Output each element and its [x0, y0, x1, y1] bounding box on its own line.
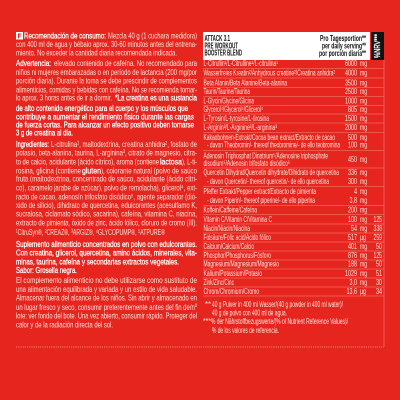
NRV percentages: 338	[374, 224, 382, 233]
table header: NRV column: %NRV***	[373, 34, 382, 58]
units: µg	[360, 233, 366, 242]
text block: usage recommendation	[16, 30, 197, 58]
units: mg	[360, 133, 367, 142]
NRV percentages: 50	[376, 242, 382, 251]
units: mg	[360, 177, 367, 186]
amounts per serving: 188	[348, 260, 357, 268]
ingredient names: L-Tyrosin/L-tyrosine/L-tirosina	[204, 114, 269, 123]
units: mg	[360, 140, 367, 150]
NRV percentages	[374, 215, 382, 296]
text block: ingredients: L-citrulina¹, maltodextrina, creatina anhidra², fosfato de	[51, 139, 197, 149]
NRV percentages: 51	[376, 269, 382, 278]
text block: warning: elevado contenido de cafeína. No recomendado para	[54, 58, 197, 68]
text block: product description: Sabor: Grosella negra.	[16, 265, 77, 275]
amounts per serving: 3500	[345, 78, 357, 88]
NRV percentages: 125	[374, 215, 382, 224]
units: mg	[360, 87, 367, 96]
units: mg	[360, 114, 367, 123]
units: mg	[360, 260, 367, 268]
text block: warning: porción diaria). Durante la toma se debe prescindir de complementos	[16, 76, 197, 86]
text block: usage recommendation: Recomendación de consumo:	[24, 30, 106, 40]
units: mg	[360, 78, 367, 88]
units: mg	[360, 206, 367, 214]
ingredient names: Phosphor/Phosphorus/Fósforo	[204, 251, 271, 260]
text block: warning: 3 g de creatina al día.	[16, 128, 73, 138]
text block: ingredients: rosina, glicina (contiene	[16, 165, 81, 175]
text block: warning: lo aprox. 3 horas antes de ir a dormir.	[16, 92, 112, 102]
text block: usage recommendation: miento. No exceder la cantidad diaria recomendada indicada.	[16, 48, 177, 58]
amounts per serving: 1500	[345, 114, 357, 123]
ingredient names: Magnesium/Magnesium/Magnesio	[204, 260, 279, 268]
ingredient names: Taurin/Taurine/Taurina	[204, 87, 250, 96]
units: µg	[360, 287, 366, 296]
units: mg	[360, 96, 367, 106]
ingredient names: Chrom/Chromium/Cromo	[204, 287, 259, 296]
amounts per serving: 517	[348, 233, 357, 242]
units: mg	[360, 196, 367, 205]
amounts per serving: 100	[348, 140, 357, 150]
ingredient names: Glycerol⁴/Glycerol⁴/Glicerol⁴	[204, 105, 263, 114]
table header: NRV column	[371, 32, 384, 60]
text block: ingredients: Ingredientes:	[16, 139, 49, 149]
amounts per serving: 100	[348, 215, 357, 224]
text block: ingredients: co), caramelo jarabe de azúcar), polvo de remolacha), glicerol⁴, ext-	[16, 182, 197, 192]
text block: product description: Suplemento alimenticio concentrados en polvo con edulcorantes.	[16, 239, 197, 249]
ingredient names	[204, 59, 340, 296]
text block: ingredients: racto de cacao, adenosín trifosfato disódico⁵, agente separador (dió-	[16, 191, 197, 201]
NRV percentages: 34	[376, 287, 382, 296]
text block: warning: Advertencia:	[16, 58, 51, 68]
NRV percentages: 259	[374, 233, 382, 242]
text block: storage notice: calor y de la radiación directa del sol.	[16, 320, 113, 330]
text block: warning: contribuye a aumentar el rendimiento físico durante las cargas	[16, 111, 194, 121]
units: mg	[360, 105, 367, 114]
units: mg	[360, 242, 367, 251]
amounts per serving: 4	[354, 187, 357, 196]
text block: ingredients: xido de silicio), dihidrato de quercetina, edulcorantes (acesulfamo K,	[16, 200, 197, 210]
text block: ingredients: gluten	[82, 165, 101, 175]
text block: usage recommendation: con 400 ml de agua y bébalo aprox. 30-60 minutos antes del entrena-	[16, 39, 197, 49]
amounts per serving	[345, 59, 357, 296]
text block: product description: minas, taurina, cafeína y secondarias extractos vegetales.	[16, 256, 179, 266]
footnotes: **	[205, 300, 211, 309]
footnotes: ***	[203, 317, 211, 326]
ingredient names: L-Glycin/Glycine/Glicina	[204, 96, 254, 106]
units	[360, 59, 367, 296]
units: mg	[360, 215, 367, 224]
text block: ingredients: ), colorante natural (polvo de saúco	[101, 165, 197, 175]
ingredient names: Folsäure/Folic acid/Ácido fólico	[204, 233, 271, 242]
amounts per serving: 1000	[345, 96, 357, 106]
icon: info square	[16, 32, 23, 40]
units: mg	[360, 251, 367, 260]
text block: warning: niños ni mujeres embarazadas o en período de lactancia (200 mg/por	[16, 67, 197, 77]
text block: ingredients	[16, 139, 197, 237]
amounts per serving: 401	[348, 242, 357, 251]
footnotes	[203, 300, 349, 335]
units: mg	[360, 187, 367, 196]
text block: ingredients: lactosa	[160, 156, 182, 166]
text block: storage notice: un lugar fresco y seco, consumir preferentemente antes del fin de/nº	[16, 302, 198, 312]
units: mg	[360, 59, 367, 68]
amounts per serving: 3,8	[350, 196, 357, 205]
text block: storage notice: Almacenar fuera del alcance de los niños. Sin abrir y almacenado en	[16, 292, 197, 302]
units: mg	[360, 68, 367, 78]
units: mg	[360, 123, 367, 132]
amounts per serving: 805	[348, 105, 357, 114]
ingredient names: disodium⁵/Adenosin trifosfato disódico⁵	[204, 159, 290, 168]
text block: storage notice: una alimentación equilibrada y variada y un estilo de vida saludable.	[16, 284, 197, 294]
ingredient names: Pfeffer Extrakt/Pepper extract/Extracto de pimienta	[204, 187, 316, 196]
text block: storage notice: El complemento alimenticio no debe utilizarse como sustituto de	[16, 275, 197, 285]
NRV percentages: 50	[376, 260, 382, 268]
ingredient names: L-Arginin³/L-Arginine³/L-arginina³	[204, 123, 277, 132]
ingredient names: Calcium/Calcium/Calcio	[204, 242, 254, 251]
units: mg	[360, 224, 367, 233]
table header: product name: por porción diaria**	[319, 49, 367, 58]
text block: ingredients: fruta (maltodextrina, concentrado de saúco, acidulante (ácido cítri-	[16, 174, 197, 184]
text block: ingredients: to de calcio, acidulante (ácido cítrico), aroma (contiene	[16, 156, 159, 166]
ingredient names: Beta Alanin/Beta Alanine/Beta-alanina	[204, 78, 287, 88]
units: mg	[360, 269, 367, 278]
amounts per serving: 200	[348, 206, 357, 214]
amounts per serving: 300	[348, 177, 357, 186]
amounts per serving: 4000	[345, 68, 357, 78]
text block: storage notice	[16, 275, 198, 330]
units: mg	[360, 168, 367, 177]
table rows: nutrition values	[203, 59, 384, 347]
amounts per serving: 876	[348, 251, 357, 260]
row separators	[203, 60, 384, 347]
amounts per serving: 450	[348, 155, 357, 164]
units: mg	[360, 278, 367, 287]
text block: warning: alimenticios, comidas y bebidas con cafeína. No se recomienda tomar-	[16, 84, 197, 94]
table header: product name: BOOSTER BLEND	[204, 48, 242, 58]
ingredient names: Koffein/Caffeine/Cafeína	[204, 206, 257, 214]
text block: product description	[16, 239, 197, 275]
table header: product name	[203, 32, 370, 60]
NRV percentages: 125	[374, 251, 382, 260]
text block: warning: de alto contenido energético para el cuerpo y los músculos que	[16, 103, 188, 113]
panel: consumer text column	[16, 30, 198, 330]
NRV percentages: 30	[376, 278, 382, 287]
amounts per serving: 2000	[345, 123, 357, 132]
ingredient names: Kalium/Potassium/Potasio	[204, 269, 262, 278]
table header: product name: per daily serving**	[322, 42, 367, 50]
amounts per serving: 6000	[345, 59, 357, 68]
text block: warning: de fuerza cortas. Para alcanzar un efecto positivo deben tomarse	[16, 120, 194, 130]
amounts per serving: 13,6	[346, 287, 357, 296]
text block: ingredients: ), L-ti-	[182, 156, 197, 166]
table header: product name: Pro Tagesportion**	[320, 34, 367, 43]
ingredient names: L-Citrullin¹/L-Citrulline¹/L-citrulina¹	[204, 59, 278, 68]
text block: product description: Con creatina, glicerol, quercetina, amino ácidos, minerales, vita-	[16, 248, 197, 258]
ingredient names: Niacin/Niacin/Niacina	[204, 224, 250, 233]
table header: product name: ATTACK 3.1	[204, 34, 230, 43]
text block: storage notice: lote: ver fondo del bote. Una vez abierto, consumir rápido. Proteger del	[16, 311, 197, 321]
ingredient names: Zink/Zinc/Cinc	[204, 278, 234, 287]
text block: ingredients: potasio, beta-alanina, taurina, L-arginina³, citrato de magnesio, citra-	[16, 147, 197, 157]
amounts per serving: 336	[348, 168, 357, 177]
text block: ingredients: ¹CitruSyn®, ²CREAZ®, ³ARGIZ®, ⁴GLYCOPUMP®, ⁵ATPURE®	[16, 227, 165, 237]
ingredient names: Vitamin C/Vitamin C/Vitamina C	[204, 215, 272, 224]
text block: usage recommendation: Mezcla 40 g (1 cuchara medidora)	[108, 30, 197, 40]
text block: warning: *La creatina es una sustancia	[115, 92, 197, 102]
text block: ingredients: extracto de pimienta, óxido de zinc, ácido fólico, cloruro de cromo (III).	[16, 217, 197, 227]
amounts per serving: 500	[348, 133, 357, 142]
amounts per serving: 54	[351, 224, 357, 233]
table header: product name: PRE WORKOUT	[204, 42, 238, 50]
amounts per serving: 3,0	[350, 278, 357, 287]
text block: warning	[16, 58, 197, 138]
amounts per serving: 2500	[345, 87, 357, 96]
footnotes: % de los valores de referencia.	[212, 326, 279, 335]
units: mg	[360, 155, 367, 164]
amounts per serving: 1029	[345, 269, 357, 278]
footnotes: 40 g de polvo con 400 ml de agua.	[212, 308, 287, 318]
text block: ingredients: sucralosa, ciclamato sódico, sacarina), cafeína, vitamina C, niacina,	[16, 209, 197, 219]
ingredient names: - davon Piperin/- thereof piperine/- de ello piperina	[207, 196, 315, 205]
